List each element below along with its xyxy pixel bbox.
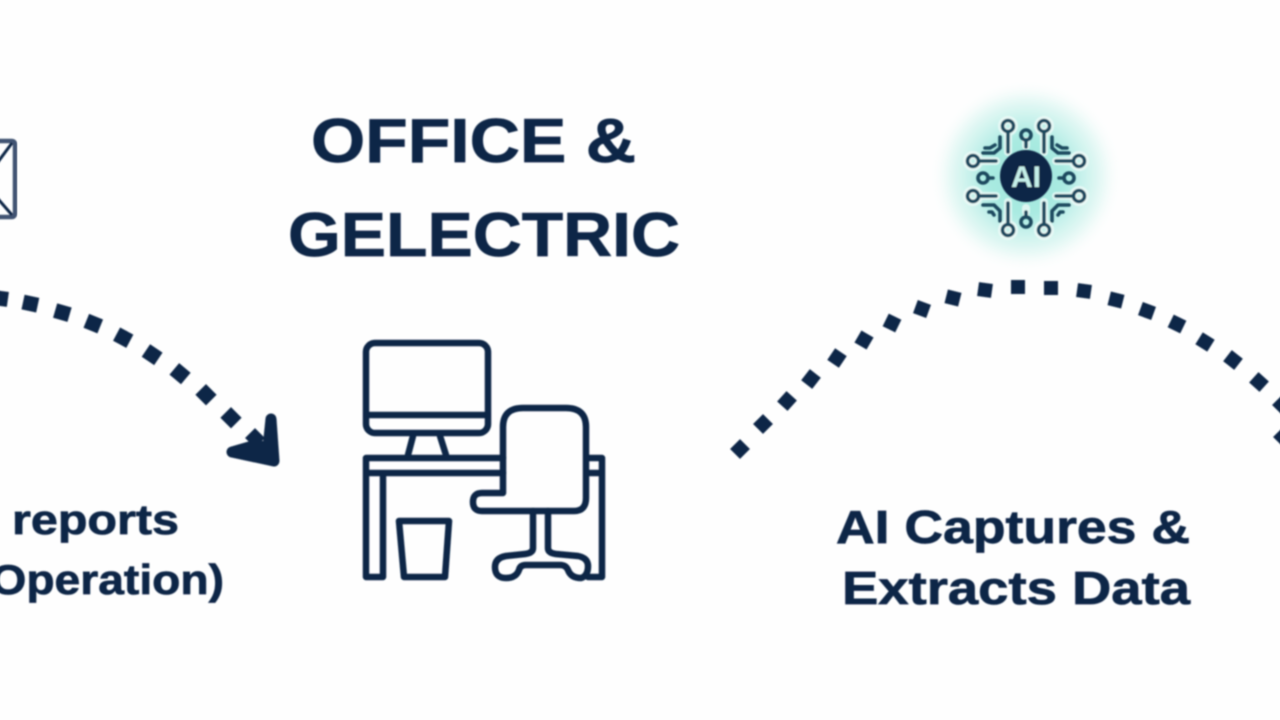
title: office and gelectric <box>288 107 680 270</box>
wastebasket <box>399 521 449 577</box>
circuit traces <box>967 120 1085 236</box>
ai badge <box>1000 150 1052 202</box>
monitor <box>366 343 488 455</box>
icon: office desk <box>366 343 602 578</box>
text: ai captures and extracts data <box>836 501 1190 614</box>
text: reports operation <box>0 496 224 603</box>
arrow: dotted arrow to office <box>0 290 274 461</box>
text: ai captures and extracts data: AI Captures & <box>836 501 1190 553</box>
ai badge: AI <box>1011 161 1041 194</box>
text: ai captures and extracts data: Extracts Data <box>842 562 1190 614</box>
icon: ai chip <box>930 80 1122 272</box>
desk <box>366 458 602 577</box>
text: reports operation: reports <box>12 496 179 543</box>
arrow: dotted arc <box>730 280 1280 459</box>
icon: envelope <box>0 141 15 217</box>
title: office and gelectric: GELECTRIC <box>288 201 680 270</box>
title: office and gelectric: OFFICE & <box>311 107 636 176</box>
chair <box>473 408 588 578</box>
glow <box>930 80 1122 272</box>
